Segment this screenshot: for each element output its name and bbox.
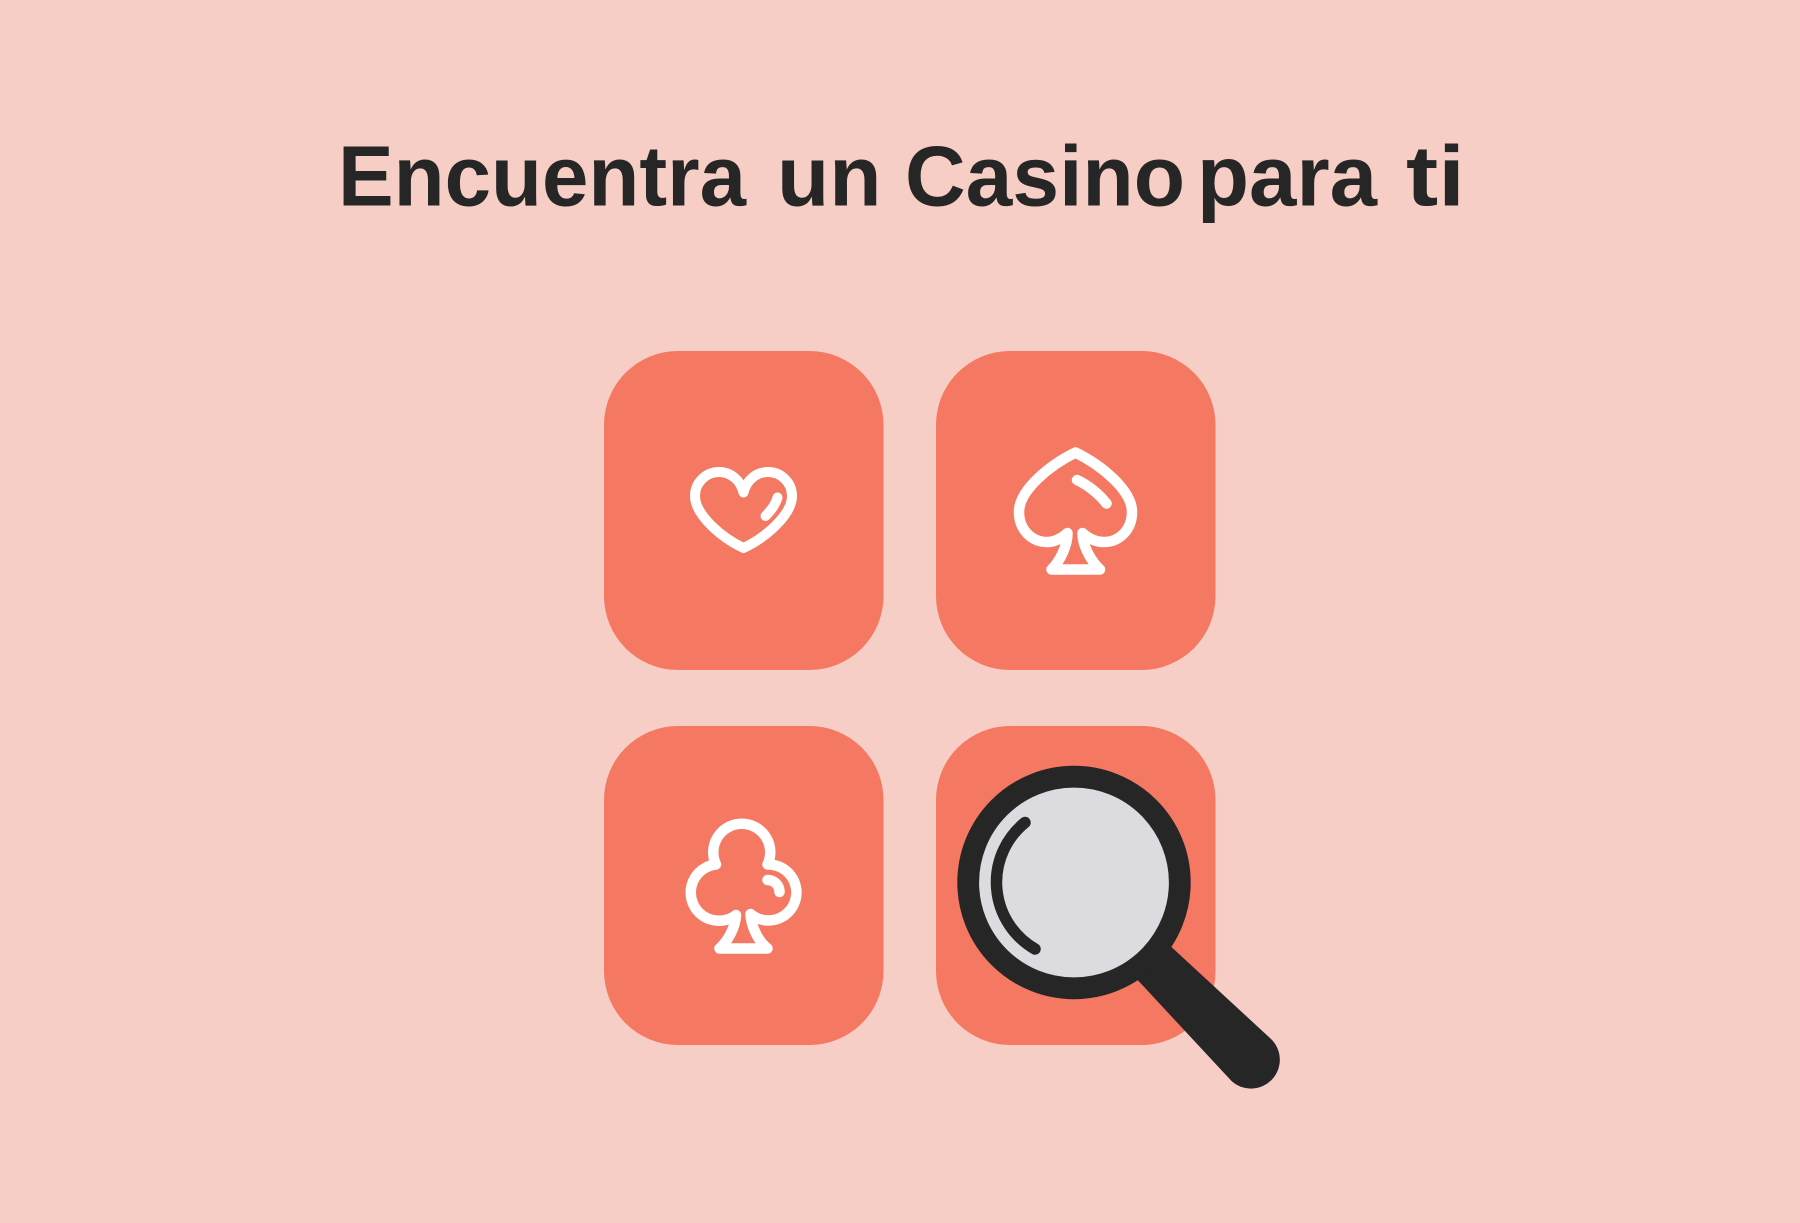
icon: heart — [695, 472, 792, 548]
panel: club card — [604, 726, 884, 1045]
title — [338, 130, 1465, 224]
panel: spade card — [936, 351, 1216, 670]
icon: magnifying glass — [968, 777, 1280, 1089]
magnifier lens — [968, 777, 1180, 988]
lens highlight — [996, 822, 1035, 949]
title: un — [777, 130, 882, 224]
panel: heart card — [604, 351, 884, 670]
title: Encuentra — [338, 130, 747, 224]
panel: magnifier card — [936, 726, 1216, 1045]
title: para — [1197, 130, 1378, 224]
icon: club — [691, 824, 796, 948]
title: Casino — [905, 130, 1185, 224]
icon: spade — [1019, 452, 1132, 570]
magnifier handle — [1120, 925, 1280, 1089]
title: ti — [1406, 130, 1465, 224]
